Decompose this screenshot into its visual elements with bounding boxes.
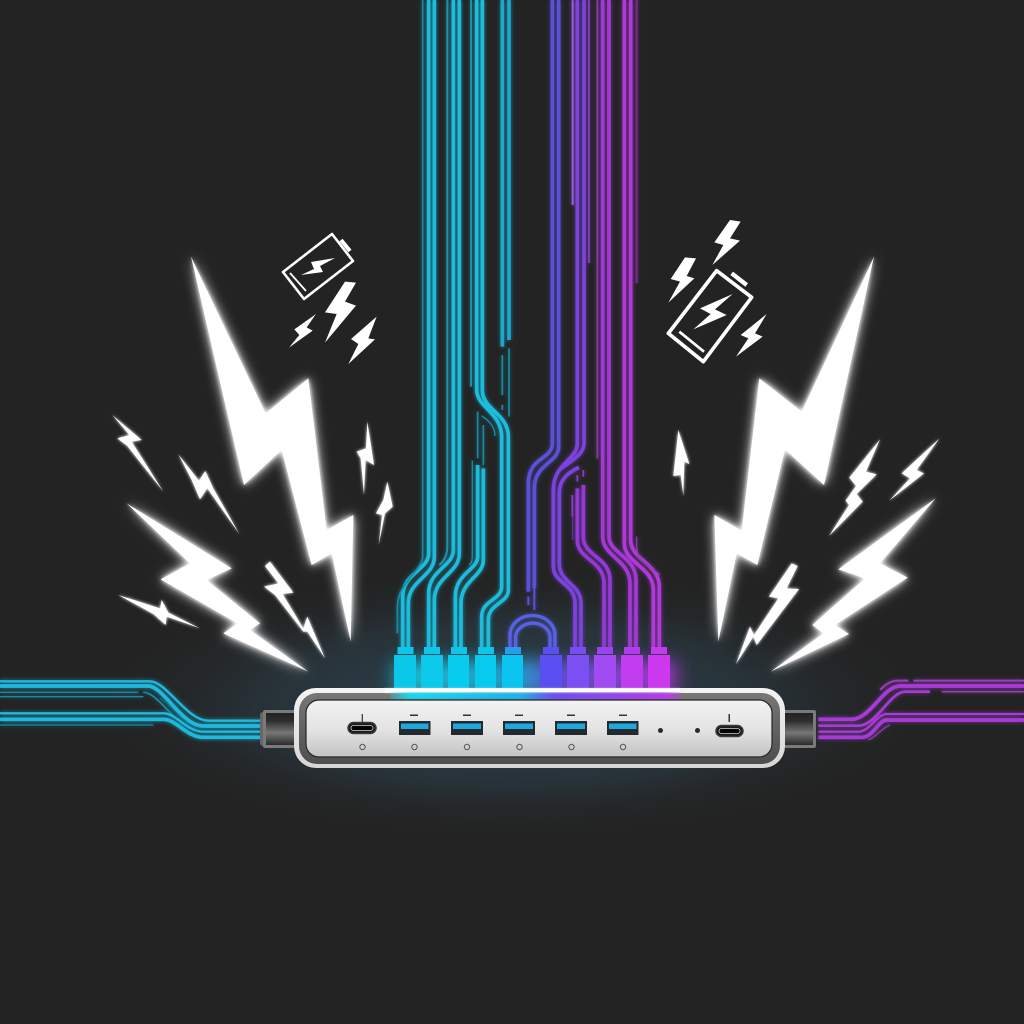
purple cable bundle bbox=[553, 0, 610, 648]
indicator dot right bbox=[695, 728, 700, 733]
icon: left battery bbox=[283, 234, 353, 299]
connector caps bbox=[398, 647, 667, 654]
left side cables bbox=[0, 681, 260, 737]
small bolt far right bbox=[889, 439, 939, 501]
USB-A port 1 bbox=[399, 714, 430, 750]
USB-A port 4 bbox=[555, 714, 587, 750]
main right bolt bbox=[714, 257, 874, 642]
icon: right battery bbox=[668, 271, 752, 362]
hub outer shell bbox=[294, 688, 785, 768]
indicator dot left bbox=[658, 728, 663, 733]
right plug bbox=[783, 710, 816, 748]
small bolt centre left bbox=[178, 454, 239, 534]
lower right large bolt bbox=[771, 498, 936, 672]
magenta cable bundle bbox=[597, 0, 660, 648]
main left bolt bbox=[191, 257, 353, 642]
right side cables bbox=[818, 681, 1024, 740]
spark top bolt bbox=[712, 220, 741, 265]
spark left bolt bbox=[668, 257, 696, 303]
USB-A port 2 bbox=[451, 714, 483, 750]
spark cluster bolt left bbox=[289, 314, 316, 348]
connector glow bbox=[385, 660, 680, 694]
background glow around hub bbox=[60, 540, 964, 880]
hub dark bezel bbox=[299, 693, 780, 764]
USB-A port 5 bbox=[607, 714, 638, 750]
spark cluster bolt large bbox=[325, 282, 356, 343]
left lightning bolts bbox=[112, 257, 393, 672]
spark right bolt bbox=[736, 314, 767, 357]
blue violet cable bundle bbox=[528, 0, 559, 610]
connector row bbox=[394, 647, 670, 688]
USB-A port 3 bbox=[503, 714, 535, 750]
small bolt lower left bbox=[118, 595, 200, 628]
small bolt far left bbox=[112, 415, 163, 492]
vertical cables bbox=[397, 0, 660, 650]
bezel colour glow bbox=[390, 691, 680, 700]
small bolt right upper bbox=[357, 422, 374, 495]
forked bolt lower centre right bbox=[736, 563, 799, 664]
hub body bbox=[294, 688, 785, 768]
small bolt right lower bbox=[376, 482, 393, 545]
right USB-C port bbox=[716, 714, 743, 736]
left plug bbox=[260, 710, 296, 748]
top highlight bbox=[385, 689, 680, 692]
small lone bolt bbox=[673, 430, 689, 496]
cyan cable bundle bbox=[397, 0, 509, 650]
hub face panel bbox=[306, 700, 772, 757]
spark cluster bolt right bbox=[348, 317, 377, 364]
forked bolt lower centre bbox=[264, 562, 325, 658]
lower left large bolt bbox=[127, 503, 308, 672]
arch cable loop bbox=[510, 616, 555, 648]
connector bodies bbox=[394, 655, 670, 688]
double zig bolt bbox=[829, 439, 880, 536]
left USB-C port bbox=[348, 714, 376, 750]
right lightning bolts bbox=[668, 220, 939, 672]
